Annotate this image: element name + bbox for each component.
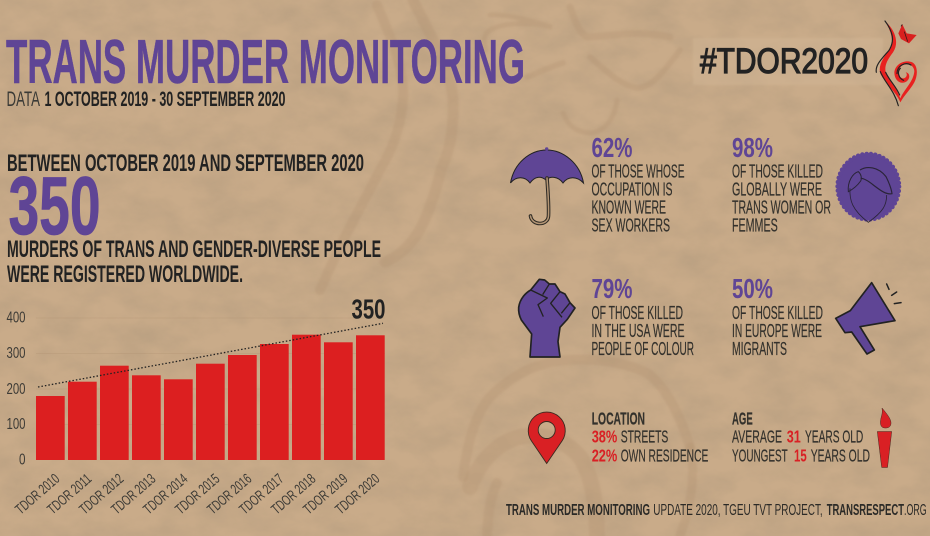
stat: people of colour: PEOPLE OF COLOUR xyxy=(592,338,694,359)
stat: sex workers: 62% xyxy=(592,132,632,163)
stat: people of colour xyxy=(519,273,694,359)
stat: migrants xyxy=(732,273,901,359)
age block: AVERAGE xyxy=(732,427,782,447)
location block: 22% xyxy=(592,446,618,466)
age block: YEARS OLD xyxy=(805,427,863,447)
icon: raised fist xyxy=(519,279,575,357)
date range line: DATA xyxy=(6,88,40,111)
stat: trans women or femmes: OF THOSE KILLED xyxy=(732,161,823,182)
age block: YEARS OLD xyxy=(811,446,870,466)
stat: trans women or femmes: FEMMES xyxy=(732,214,778,235)
icon: torch xyxy=(877,408,892,468)
stat: migrants: IN EUROPE WERE xyxy=(732,320,822,341)
location block: STREETS xyxy=(621,427,668,447)
bar chart: TDOR 2014 xyxy=(141,471,191,518)
headline statistic block: 350 xyxy=(8,159,100,252)
source footer: TRANS MURDER MONITORING xyxy=(506,502,650,519)
bar chart: 100 xyxy=(6,416,26,433)
bar chart: TDOR 2016 xyxy=(205,471,255,518)
age block xyxy=(732,408,892,468)
hashtag logo xyxy=(700,21,917,106)
source footer xyxy=(506,502,927,519)
stat: sex workers: SEX WORKERS xyxy=(592,214,670,235)
bar chart xyxy=(6,294,386,518)
bar chart: 200 xyxy=(6,381,26,398)
date range line xyxy=(6,88,286,111)
bar chart: TDOR 2019 xyxy=(301,471,351,518)
bar chart: TDOR 2011 xyxy=(45,471,95,518)
location block: 38% xyxy=(592,427,618,447)
location block xyxy=(528,409,708,466)
bar chart: TDOR 2018 xyxy=(269,471,319,518)
age block: YOUNGEST xyxy=(732,446,788,466)
date range line: 1 OCTOBER 2019 - 30 SEPTEMBER 2020 xyxy=(44,88,286,111)
stat: trans women or femmes: GLOBALLY WERE xyxy=(732,179,822,200)
icon: map pin xyxy=(528,412,565,464)
stat: migrants: MIGRANTS xyxy=(732,338,787,359)
bar chart: 350 xyxy=(352,294,386,324)
source footer: UPDATE 2020, TGEU TVT PROJECT, xyxy=(653,502,823,519)
bar chart: TDOR 2015 xyxy=(173,471,223,518)
headline statistic block xyxy=(7,150,381,288)
headline statistic block: MURDERS OF TRANS AND GENDER-DIVERSE PEOPLE xyxy=(7,236,381,263)
stat: sex workers: OF THOSE WHOSE xyxy=(592,161,684,182)
stat: migrants: 50% xyxy=(732,273,773,304)
stat: sex workers: KNOWN WERE xyxy=(592,196,666,218)
stat: people of colour: IN THE USA WERE xyxy=(592,320,684,341)
bar chart: 300 xyxy=(6,345,26,362)
icon: umbrella xyxy=(510,147,584,224)
age block: 15 xyxy=(794,446,807,466)
stat: migrants: OF THOSE KILLED xyxy=(732,302,823,323)
stat: people of colour: 79% xyxy=(592,273,632,304)
stat: trans women or femmes: TRANS WOMEN OR xyxy=(732,196,831,218)
title: TRANS MURDER MONITORING xyxy=(6,27,525,97)
age block: AGE xyxy=(732,409,753,429)
location block: LOCATION xyxy=(592,409,645,429)
stat: trans women or femmes: 98% xyxy=(732,132,773,163)
hashtag logo: #TDOR2020 xyxy=(700,42,868,81)
bar chart: TDOR 2010 xyxy=(13,471,63,518)
bar chart: 0 xyxy=(19,452,26,468)
stat: sex workers xyxy=(510,132,684,235)
stat: people of colour: OF THOSE KILLED xyxy=(592,302,683,323)
bar chart: TDOR 2013 xyxy=(109,471,159,518)
icon: megaphone xyxy=(836,283,901,354)
bar chart: 400 xyxy=(6,310,26,326)
stat: trans women or femmes xyxy=(732,132,899,235)
headline statistic block: BETWEEN OCTOBER 2019 AND SEPTEMBER 2020 xyxy=(7,150,364,177)
icon: afro head xyxy=(838,154,899,222)
bar chart: TDOR 2017 xyxy=(237,471,287,518)
bar chart: TDOR 2012 xyxy=(77,471,127,518)
stat: sex workers: OCCUPATION IS xyxy=(592,179,672,200)
bar chart: TDOR 2020 xyxy=(333,471,383,518)
location block: OWN RESIDENCE xyxy=(621,446,708,466)
age block: 31 xyxy=(787,427,801,447)
headline statistic block: WERE REGISTERED WORLDWIDE. xyxy=(7,261,243,288)
